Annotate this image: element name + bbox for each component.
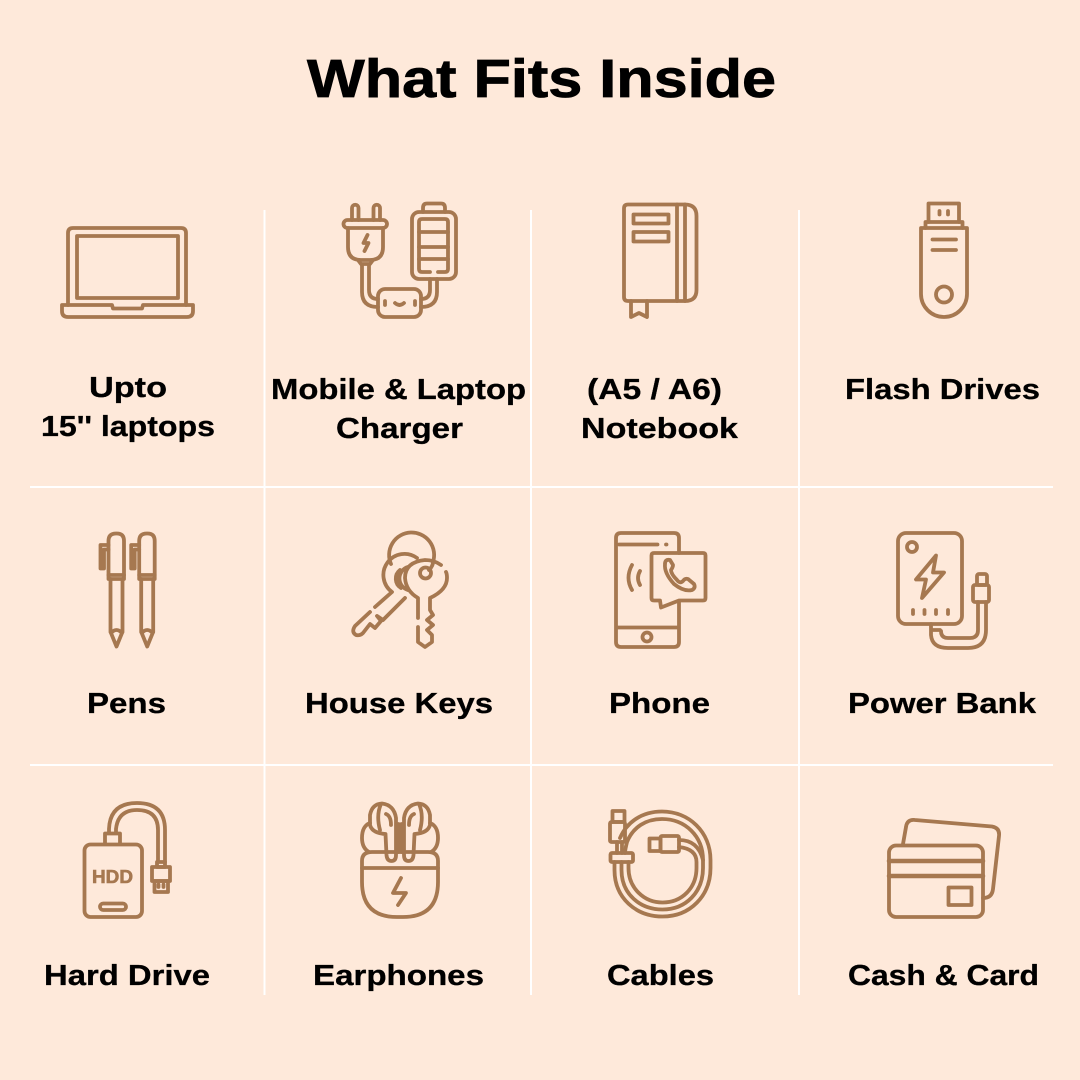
label: house keys: House Keys [305, 688, 493, 720]
label: cash and card: Cash & Card [848, 960, 1039, 992]
label: pens: Pens [87, 688, 166, 720]
label: notebook [581, 374, 738, 445]
icon: flash drive [921, 204, 967, 317]
text: HDD: HDD [92, 867, 133, 887]
label: chargers: Mobile & Laptop [271, 374, 526, 406]
label: hard drive: Hard Drive [44, 960, 210, 992]
title: What Fits Inside [307, 49, 776, 109]
label: laptops: 15'' laptops [41, 411, 215, 443]
icon: cables [610, 811, 710, 916]
label: earphones: Earphones [313, 960, 484, 992]
label: notebook: (A5 / A6) [587, 374, 722, 406]
label: phone: Phone [609, 688, 710, 720]
label: chargers: Charger [336, 413, 463, 445]
icon: phone [616, 533, 706, 647]
icon: earphones [362, 804, 438, 917]
icon: cards [889, 820, 999, 917]
icon: pens [100, 534, 155, 646]
label: cables: Cables [607, 960, 714, 992]
label: power bank: Power Bank [848, 688, 1036, 720]
label: laptops [41, 372, 215, 443]
icon: chargers [344, 204, 456, 317]
icon: notebook [624, 204, 696, 317]
icon: hard drive [84, 803, 170, 917]
label: notebook: Notebook [581, 413, 738, 445]
icon: power bank [898, 533, 989, 648]
label: laptops: Upto [89, 372, 167, 404]
label: flash drives: Flash Drives [845, 374, 1040, 406]
icon: laptop [62, 228, 193, 317]
label: chargers [271, 374, 526, 445]
icon: house keys [353, 532, 447, 647]
